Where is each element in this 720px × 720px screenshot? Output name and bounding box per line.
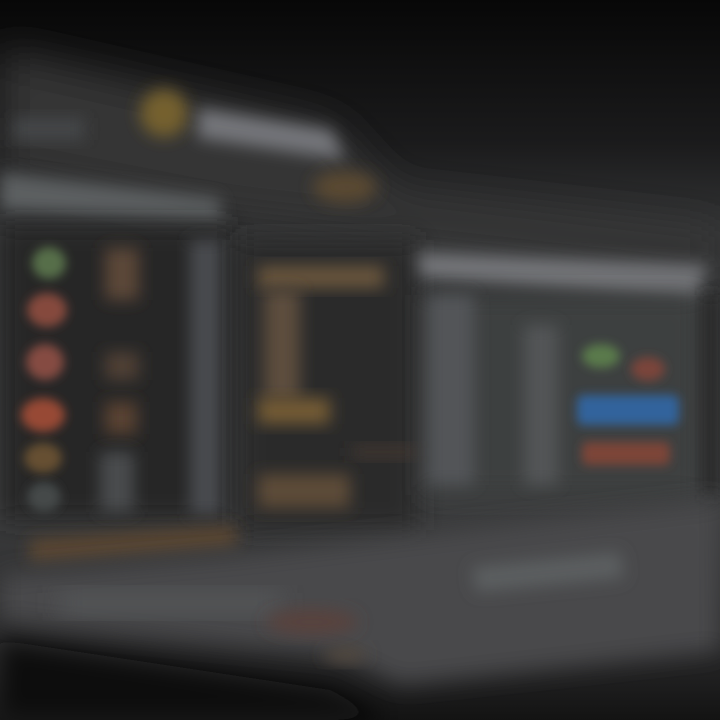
panel: left header band [0,172,222,225]
header title [198,108,345,160]
strip: orange footer [30,526,238,562]
panel: left table [0,225,232,520]
icon: gold circle logo [140,89,188,137]
bar: red [582,442,670,465]
gold footer [258,474,350,508]
column: grey values [190,240,222,515]
gold highlight [258,398,330,424]
gold column [264,290,300,400]
floor highlight [472,552,624,592]
floor gold blur [323,647,367,663]
column: status dots [21,247,67,512]
floor highlight left [60,592,280,614]
bar: blue [577,395,679,425]
column: grey [428,295,474,485]
header small label [14,118,84,140]
legend: green [582,344,620,368]
panel: right edge dark [702,295,720,495]
panel: middle gold text block [238,240,418,530]
panel: top header [0,50,720,270]
floor red blur [266,609,358,635]
panel: right header band [418,252,708,300]
panel: right table [425,295,700,495]
gold heading [258,266,384,288]
legend: red [631,357,665,381]
column: brown values [100,248,139,512]
red rule [352,446,418,458]
column: grey second [524,325,558,485]
panel: floor [0,500,720,685]
gold accent [313,171,377,203]
bottom shadow [0,640,390,720]
